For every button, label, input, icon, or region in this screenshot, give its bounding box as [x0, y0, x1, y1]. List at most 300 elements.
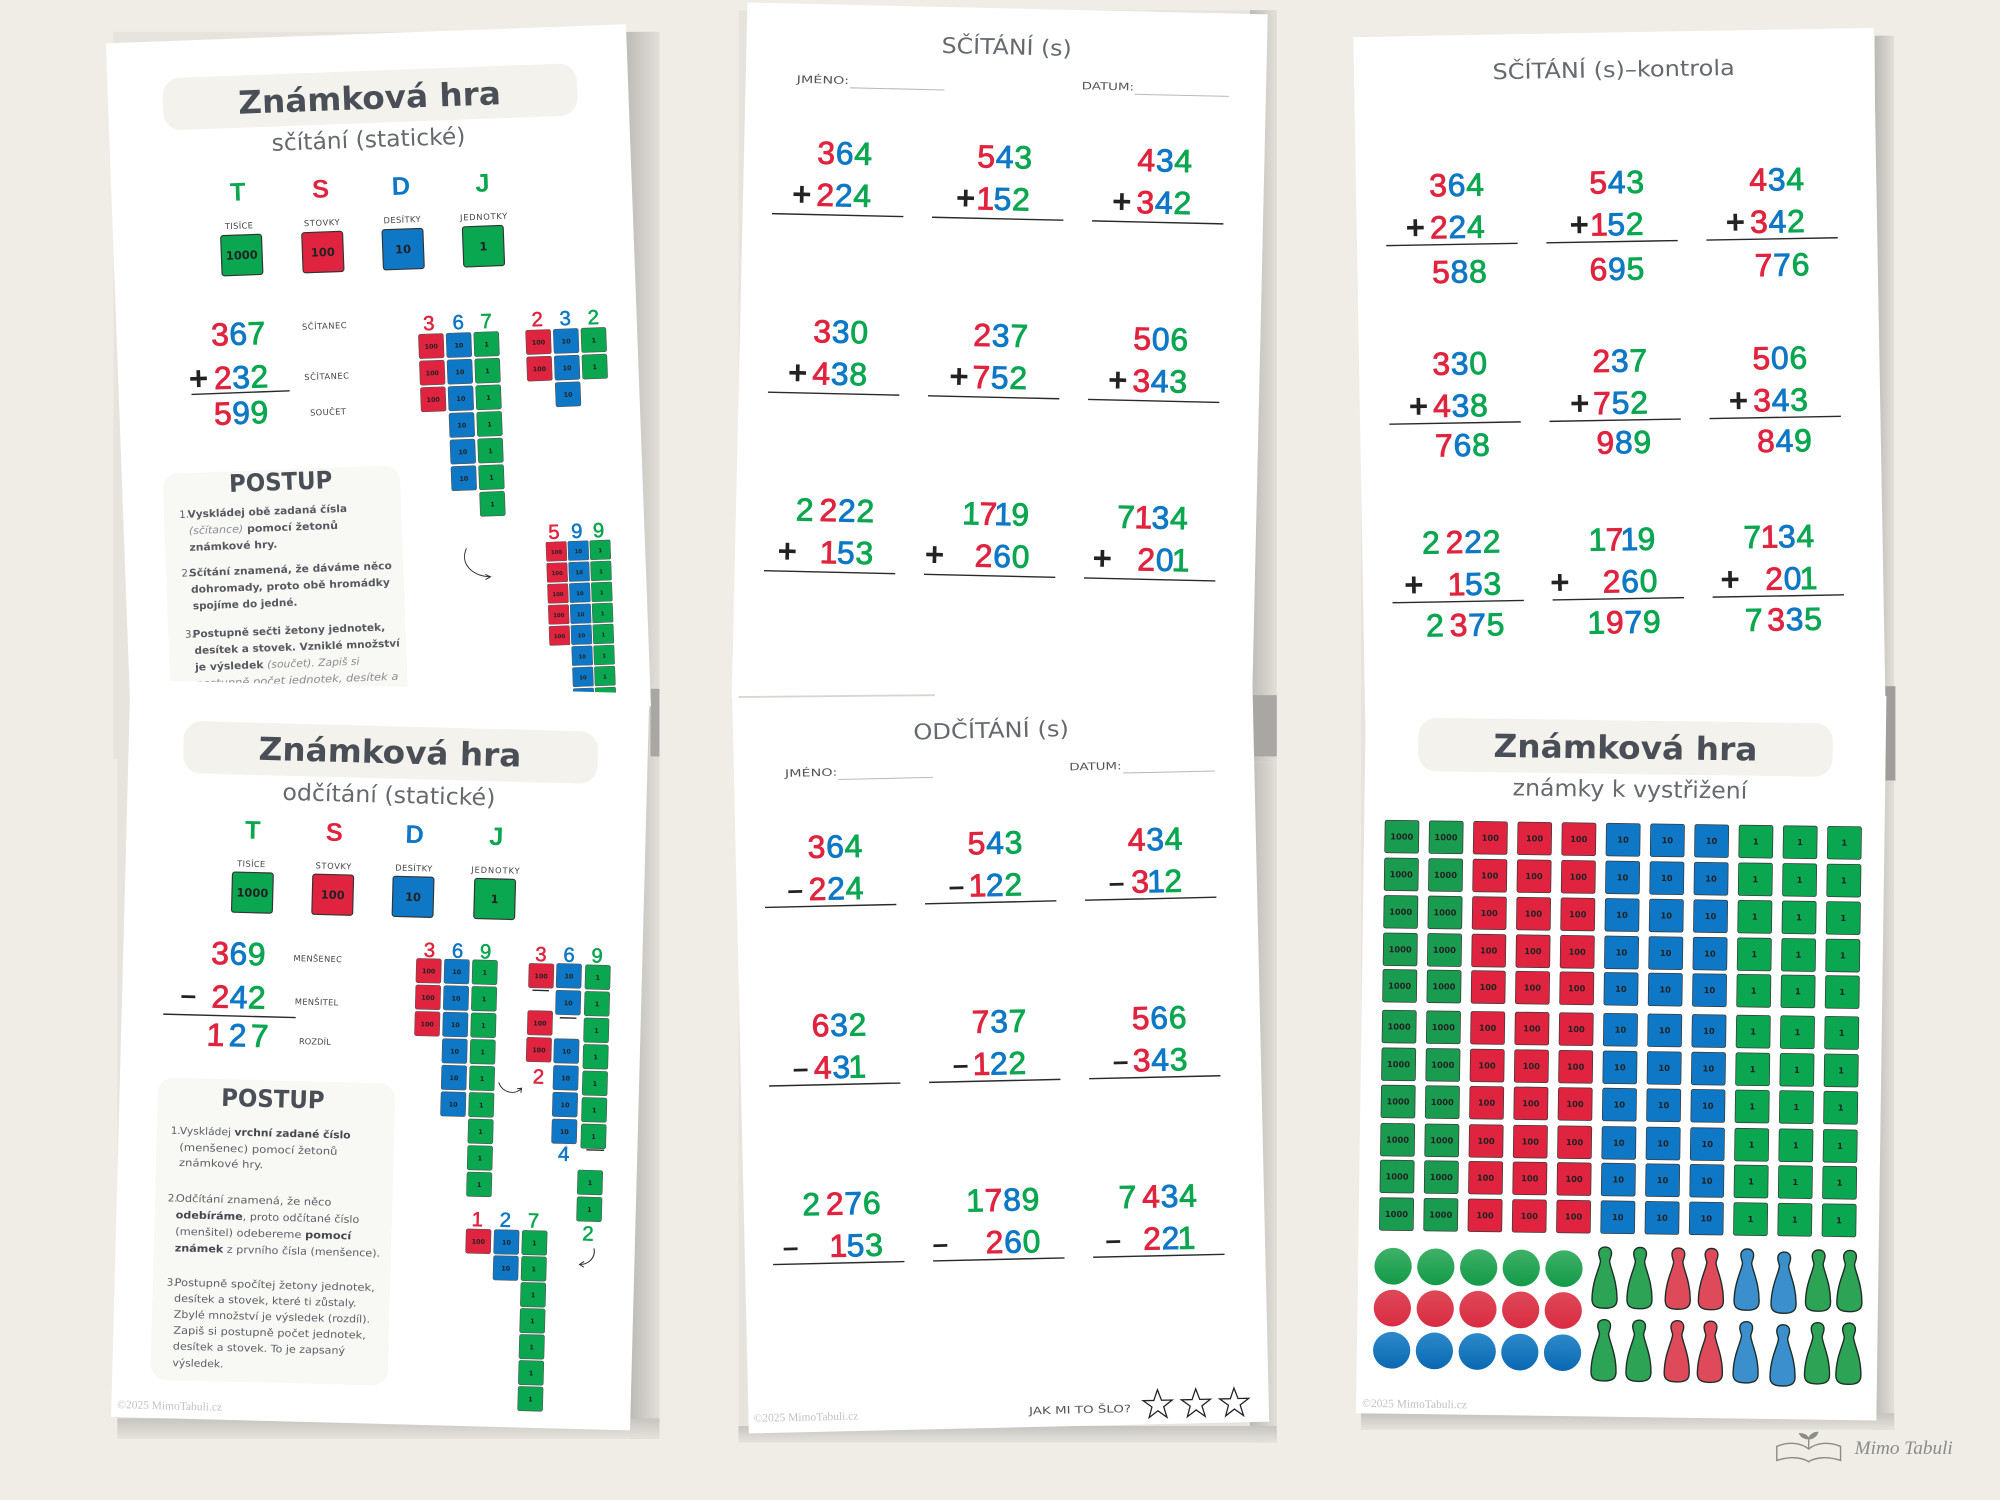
problem 566 - 343: 343 [1132, 1041, 1189, 1078]
sticker row 2: 100 [1481, 870, 1499, 881]
place value letters: S [325, 819, 343, 847]
place value labels: JEDNOTKY [459, 211, 508, 223]
place value tiles: 10 [395, 242, 411, 257]
copyright: ©2025 MimoTabuli.cz [1362, 1398, 1467, 1411]
sticker row 1: 10 [1617, 835, 1629, 845]
sticker row 9 [1380, 1123, 1857, 1163]
page: Známková hra odčítání [111, 680, 649, 1430]
sticker row 10: 1 [1748, 1176, 1754, 1186]
sticker row 7: 100 [1478, 1060, 1496, 1071]
problem 7 134 + 201: 7134 [1117, 499, 1189, 536]
sticker row 4 [1383, 933, 1860, 972]
rating stars [1143, 1388, 1249, 1418]
tile stack with removed tiles: 100 [534, 972, 548, 981]
title: Známková hra [1493, 727, 1758, 769]
problem 434 + 342 [1092, 141, 1225, 224]
step 2: Sčítání znamená, že dáváme něco [189, 560, 392, 579]
problem 566 - 343: 566 [1131, 999, 1188, 1036]
answer 364 + 224 = 588: 588 [1432, 253, 1488, 290]
tile stack 367: 1 [488, 447, 493, 455]
problem 506 + 343 [1088, 319, 1221, 402]
tile stack 599: 10 [578, 654, 586, 660]
sticker row 1: 100 [1482, 833, 1499, 843]
tile stack 232: 100 [532, 338, 546, 347]
problem 7 434 - 221: – [1105, 1224, 1121, 1255]
problem 364 - 224: 224 [808, 870, 864, 907]
sticker row 2: 10 [1705, 874, 1717, 884]
answer 506 + 343 = 849: 343 [1753, 381, 1809, 418]
digits 3 6 9: 3 [424, 940, 435, 962]
digits 3 6 7: 6 [452, 312, 464, 334]
answer 364 + 224 = 588 [1385, 166, 1518, 291]
answer 434 + 342 = 776: + [1725, 204, 1745, 241]
sticker row 11: 10 [1700, 1213, 1712, 1223]
equation labels: SČÍTANEC [302, 319, 347, 332]
sticker row 4: 10 [1704, 949, 1716, 959]
answer 2 222 + 153 = 2 375: 2222 [1422, 523, 1501, 561]
sticker row 2: 1000 [1390, 869, 1413, 879]
problem 330 + 438: 330 [813, 313, 869, 350]
digits 2 3 2 [531, 307, 599, 331]
sticker row 8: 100 [1566, 1099, 1584, 1109]
tile stack with removed tiles: 1 [593, 1053, 598, 1061]
sticker row 1: 1 [1841, 838, 1848, 848]
problem 7 134 + 201 [1084, 498, 1217, 581]
problem 364 + 224: 224 [816, 177, 872, 214]
problem 1 719 + 260: 1719 [962, 495, 1030, 533]
tile stack 367: 1 [485, 367, 490, 375]
tile stack 369: 1 [478, 1128, 483, 1136]
removed counts 2 4 2: 2 [582, 1223, 594, 1246]
sticker row 5: 100 [1568, 983, 1586, 993]
worked subtraction 369 - 242 = 127: – [180, 979, 197, 1010]
place value labels: STOVKY [315, 860, 352, 871]
tile stack with removed tiles: 100 [532, 1046, 546, 1054]
tile stack 367: 10 [454, 341, 464, 350]
answer 1 719 + 260 = 1 979: 1979 [1587, 603, 1662, 641]
problem 434 + 342: + [1112, 183, 1132, 221]
place value letters: J [475, 169, 490, 198]
tile stack 232: 1 [591, 336, 596, 345]
tile stack 369: 10 [451, 1021, 460, 1029]
tile stack 599: 10 [576, 591, 584, 597]
arrow: take away [499, 1082, 522, 1093]
sticker row 5: 10 [1659, 984, 1671, 995]
place value tiles [231, 872, 516, 920]
tile stack with removed tiles: 1 [595, 974, 600, 982]
tile stack 367: 1 [490, 500, 495, 509]
sticker row 7: 1 [1838, 1065, 1844, 1075]
panel: postup steps [150, 1077, 395, 1386]
answer 434 + 342 = 776: 342 [1750, 203, 1806, 240]
place value tiles: 1000 [236, 885, 269, 900]
sticker row 3: 10 [1660, 910, 1672, 921]
answer 330 + 438 = 768: 768 [1435, 427, 1491, 464]
answer 364 + 224 = 588: 364 [1429, 166, 1485, 203]
tile stack 599: 10 [575, 549, 583, 555]
arrow: combine stacks [464, 548, 491, 580]
problem 543 - 122: 122 [968, 866, 1023, 903]
tile stack 232: 10 [562, 337, 571, 346]
answer 506 + 343 = 849: 849 [1757, 422, 1813, 459]
step 3: 3. [167, 1278, 177, 1289]
tile stack with removed tiles: 1 [594, 1027, 599, 1035]
sticker row 10: 1000 [1430, 1172, 1453, 1182]
problem 237 + 752 [928, 316, 1061, 399]
title pill [1418, 718, 1833, 777]
answer 364 + 224 = 588: + [1405, 210, 1425, 247]
sticker row 9: 10 [1613, 1138, 1625, 1148]
tile stack with removed tiles: 1 [592, 1106, 597, 1114]
problem 237 + 752: 752 [972, 359, 1028, 396]
sticker row 2: 100 [1525, 871, 1543, 881]
place value tiles: 100 [321, 888, 345, 902]
place value letters: J [489, 823, 504, 851]
sticker row 3: 100 [1481, 908, 1498, 918]
problem 7 134 + 201: 201 [1137, 541, 1191, 578]
sticker row 9: 100 [1566, 1137, 1584, 1147]
tile stack 369: 1 [479, 1101, 484, 1109]
problem 543 + 152 [932, 137, 1065, 220]
sticker row 7: 1 [1794, 1065, 1800, 1075]
equation labels: SČÍTANEC [304, 369, 349, 382]
sticker row 1: 100 [1526, 833, 1543, 844]
sticker row 1: 1000 [1390, 831, 1414, 842]
sticker row 4: 100 [1480, 945, 1498, 956]
step 2: spojíme do jedné. [193, 597, 298, 612]
worksheet title: SČÍTÁNÍ (s) [941, 33, 1072, 62]
digits 3 6 7: 3 [423, 313, 435, 335]
sticker row 5 [1383, 969, 1859, 1009]
sticker row 11: 1000 [1429, 1210, 1453, 1220]
round counters [1373, 1248, 1583, 1371]
answer 434 + 342 = 776: 434 [1749, 161, 1805, 198]
answer 364 + 224 = 588: 224 [1430, 209, 1486, 245]
tile stack 127: 1 [532, 1239, 537, 1247]
tile stack 367: 10 [458, 448, 468, 456]
worksheet title: ODČÍTÁNÍ (s) [913, 716, 1069, 746]
problem 7 134 + 201: + [1092, 540, 1112, 578]
place value labels: TISÍCE [236, 857, 265, 869]
tile stack with removed tiles: 10 [561, 1101, 570, 1109]
tile stack 369: 10 [450, 1048, 460, 1056]
problem 632 - 431: 431 [814, 1048, 867, 1086]
sticker row 7: 1000 [1431, 1060, 1455, 1070]
problem 434 - 312: 312 [1131, 863, 1183, 900]
sticker row 6 [1382, 1010, 1859, 1049]
sticker row 6: 1 [1750, 1026, 1756, 1037]
place value tiles: 100 [311, 245, 335, 260]
answer 330 + 438 = 768: 438 [1433, 387, 1489, 424]
tile stack 232: 10 [563, 364, 572, 372]
tile stack 232: 100 [533, 365, 547, 373]
tile stack 369: 1 [482, 969, 487, 977]
sticker row 10: 10 [1701, 1176, 1713, 1186]
sticker row 2: 1000 [1434, 870, 1457, 880]
problem 434 - 312: 434 [1127, 821, 1184, 858]
problem 506 + 343: 343 [1132, 362, 1188, 400]
sticker row 2: 10 [1617, 872, 1629, 882]
tile stack 599: 10 [577, 612, 585, 618]
tile stack 127: 100 [472, 1238, 486, 1246]
answer 7 134 + 201 = 7 335 [1711, 517, 1845, 639]
tile stack 127: 1 [528, 1395, 533, 1403]
sticker row 8: 10 [1702, 1101, 1714, 1111]
digits 3 6 7: 7 [480, 311, 492, 333]
sticker row 11: 100 [1476, 1210, 1494, 1220]
tile stack 367: 1 [487, 420, 492, 429]
sticker row 4: 1000 [1433, 945, 1456, 955]
step 3: je výsledek (součet). Zapiš si [194, 656, 360, 674]
tile stack 599: 1 [599, 569, 603, 575]
problem 7 434 - 221 [1091, 1177, 1225, 1258]
step 3: Zapiš si postupně počet jednotek, [173, 1325, 366, 1342]
shadow: right top page [1361, 36, 1895, 781]
answer 237 + 752 = 989: 237 [1592, 342, 1648, 379]
tile stack 127: 1 [531, 1265, 536, 1273]
sticker row 5: 100 [1479, 982, 1497, 992]
sticker row 5: 1000 [1388, 981, 1412, 991]
problem 632 - 431 [767, 1006, 900, 1087]
sticker row 6: 10 [1659, 1025, 1671, 1035]
answer key title: SČÍTÁNÍ (s)–kontrola [1492, 55, 1735, 85]
date field: DATUM: [1082, 81, 1134, 93]
step 2: 2. [168, 1193, 178, 1205]
step 1: (sčítance) pomocí žetonů [189, 519, 338, 537]
problem 237 + 752: + [949, 358, 969, 396]
copyright: ©2025 MimoTabuli.cz [117, 1399, 222, 1414]
problem 506 + 343: + [1108, 362, 1128, 399]
sticker row 5: 1 [1839, 987, 1845, 997]
problem 364 + 224: + [792, 176, 812, 214]
problem 364 - 224: 364 [807, 828, 864, 865]
tile stack with removed tiles: 1 [591, 1133, 596, 1141]
tile stack 367: 1 [486, 394, 491, 402]
problem 2 222 + 153: 2222 [795, 491, 875, 529]
sticker row 7: 100 [1567, 1062, 1585, 1072]
answer 7 134 + 201 = 7 335: 7335 [1745, 601, 1823, 638]
answer 543 + 152 = 695: 152 [1590, 206, 1645, 243]
answer 506 + 343 = 849: + [1729, 383, 1749, 420]
step 3: výsledek. [172, 1357, 224, 1370]
sticker row 3: 1000 [1433, 907, 1457, 918]
place value labels: DESÍTKY [395, 862, 433, 874]
digits 2 3 2: 3 [559, 308, 571, 330]
sticker row 6: 10 [1615, 1025, 1626, 1035]
step 3: Zbylé množství je výsledek (rozdíl). [174, 1309, 370, 1326]
sticker row 4: 10 [1660, 948, 1672, 958]
answer 2 222 + 153 = 2 375 [1391, 523, 1525, 644]
tile stack 599: 1 [601, 632, 606, 639]
sticker row 9: 10 [1701, 1139, 1713, 1149]
step 3: desítek a stovek. Vzniklé množství [194, 638, 400, 657]
place value tiles: 10 [405, 890, 421, 904]
answer 434 + 342 = 776 [1705, 160, 1839, 284]
sticker row 11: 10 [1656, 1213, 1668, 1223]
sticker row 5: 10 [1704, 985, 1716, 995]
tile stack 367: 10 [459, 475, 469, 483]
problem 2 276 - 153: 153 [829, 1227, 884, 1264]
tile stack 367: 10 [457, 421, 467, 430]
problem 364 - 224 [763, 827, 896, 908]
tile stack 599: 10 [575, 570, 583, 576]
tile stack with removed tiles: 10 [560, 1128, 569, 1136]
title: Známková hra [258, 730, 522, 775]
step 3: postupně počet jednotek, desítek a [194, 671, 399, 690]
equation labels: MENŠENEC [293, 952, 342, 964]
problem 737 - 122: – [952, 1049, 969, 1080]
subtitle: sčítání (statické) [271, 124, 466, 157]
tile stack with removed tiles: 1 [588, 1179, 592, 1187]
place value letters: D [405, 821, 424, 849]
tile stack with removed tiles: 1 [587, 1206, 592, 1214]
equation labels: MENŠITEL [295, 995, 339, 1008]
sticker row 7: 1000 [1387, 1059, 1410, 1069]
equation labels: ROZDÍL [299, 1035, 331, 1047]
page: Známková hra stickers [1356, 689, 1886, 1420]
subtitle: známky k vystřižení [1512, 775, 1748, 805]
worked subtraction 369 - 242 = 127: 369 [211, 935, 267, 972]
answer 1 719 + 260 = 1 979: 260 [1602, 563, 1658, 600]
step 2: známek z prvního čísla (menšence). [175, 1242, 380, 1260]
sticker row 3: 10 [1705, 911, 1717, 921]
sticker row 10: 1 [1792, 1177, 1799, 1187]
step 1: známkové hry. [179, 1157, 263, 1171]
sticker row 10: 10 [1612, 1174, 1624, 1185]
tile stack 367: 100 [425, 369, 440, 377]
sticker row 2: 1 [1841, 875, 1847, 886]
digits 3 6 9 [424, 940, 492, 964]
problem 2 222 + 153: 153 [819, 534, 874, 571]
sticker row 1: 10 [1706, 836, 1718, 846]
equation labels [302, 319, 351, 418]
answer 543 + 152 = 695: + [1569, 207, 1589, 244]
answer 543 + 152 = 695: 543 [1589, 164, 1645, 201]
sticker row 1: 10 [1661, 835, 1673, 845]
tile stack 369: 10 [449, 1101, 458, 1109]
place value labels: STOVKY [304, 217, 341, 228]
answer 237 + 752 = 989: + [1570, 385, 1590, 423]
place value tiles [221, 225, 505, 276]
tile stack with removed tiles: 1 [595, 1000, 599, 1008]
sticker row 9: 1 [1793, 1140, 1799, 1150]
tile stack 369: 1 [478, 1154, 482, 1163]
sticker row 6: 1 [1839, 1028, 1845, 1038]
removed counts 2 4 2 [528, 1066, 598, 1246]
sticker row 2: 1 [1752, 874, 1758, 884]
answer 506 + 343 = 849 [1708, 339, 1842, 460]
problem 1 719 + 260: 260 [974, 538, 1031, 575]
sticker row 5: 1 [1751, 986, 1757, 996]
answer 330 + 438 = 768: + [1408, 388, 1428, 425]
worked subtraction 369 - 242 = 127: 242 [211, 978, 267, 1016]
sticker row 6: 1 [1794, 1027, 1801, 1037]
sticker row 11: 10 [1612, 1212, 1624, 1222]
tile stack 599: 100 [553, 613, 565, 619]
problem 434 + 342: 342 [1136, 184, 1192, 221]
sticker row 11: 1 [1748, 1214, 1754, 1224]
sticker row 7: 10 [1658, 1063, 1670, 1073]
sticker row 7: 10 [1703, 1063, 1714, 1074]
tile stack 369: 100 [422, 967, 436, 976]
sticker row 3: 100 [1569, 909, 1587, 919]
place value labels [236, 857, 521, 876]
step 2: (menšitel) odebereme pomocí [175, 1226, 352, 1242]
step 2: odebíráme , proto odčítané číslo [176, 1209, 359, 1226]
answer 330 + 438 = 768: 330 [1432, 345, 1488, 382]
step 1 [179, 503, 349, 554]
place value labels [224, 210, 508, 231]
tile stack 369: 100 [421, 1020, 435, 1029]
tile stack 367: 10 [456, 395, 466, 403]
place value letters [229, 169, 490, 207]
step 3: 3. [185, 629, 195, 641]
step 3: Postupně sečti žetony jednotek, [192, 621, 385, 641]
sticker row 9: 1 [1837, 1141, 1843, 1151]
problem 1 789 - 260 [931, 1180, 1064, 1262]
sticker row 6: 100 [1523, 1023, 1541, 1034]
digits 3 6 9: 9 [480, 941, 492, 964]
place value letters [245, 817, 504, 851]
answer 7 134 + 201 = 7 335: + [1720, 561, 1740, 599]
digits 5 9 9 [548, 520, 605, 544]
sticker row 2 [1384, 858, 1861, 897]
name field: JMÉNO: [795, 73, 849, 87]
date field: DATUM: [1069, 761, 1122, 773]
sticker row 2: 10 [1661, 873, 1673, 883]
problem 434 - 312 [1083, 820, 1216, 901]
tile stack 127: 10 [502, 1238, 511, 1247]
sticker row 10: 100 [1565, 1174, 1583, 1184]
problem 2 276 - 153: – [782, 1231, 799, 1263]
worked addition 367 + 232 = 599: 232 [213, 358, 269, 396]
place value letters: T [229, 178, 246, 207]
problem 330 + 438 [768, 312, 901, 395]
sticker row 1 [1385, 820, 1862, 859]
sticker row 3: 100 [1525, 909, 1542, 919]
place value labels: DESÍTKY [383, 213, 422, 225]
sticker row 4: 10 [1616, 947, 1628, 957]
answer 506 + 343 = 849: 506 [1752, 339, 1808, 376]
step 2 [181, 560, 393, 613]
shadow: right bottom page [1361, 781, 1894, 1430]
step 1: známkové hry. [189, 539, 278, 554]
answer 1 719 + 260 = 1 979: 1719 [1588, 521, 1656, 558]
problem 434 - 312: – [1108, 867, 1125, 898]
tile stack 369: 1 [480, 1048, 485, 1056]
sticker row 1: 100 [1570, 834, 1588, 844]
step 1: 1. [179, 510, 189, 521]
equation labels [291, 952, 342, 1047]
problem 330 + 438: 438 [812, 355, 868, 392]
tile stack 369: 10 [451, 994, 461, 1003]
step 1: (menšenec) pomocí žetonů [179, 1142, 338, 1158]
sticker row 3: 1 [1840, 913, 1846, 923]
sticker row 3: 1000 [1389, 907, 1413, 917]
tile stack 127: 1 [530, 1317, 535, 1325]
tile stack 369: 100 [421, 994, 435, 1002]
problem 434 + 342: 434 [1137, 142, 1193, 179]
shadow: middle top page [739, 10, 1277, 763]
tile stack with removed tiles [522, 963, 610, 1222]
problem 543 - 122: – [948, 870, 965, 902]
problem 2 276 - 153 [771, 1184, 904, 1265]
copyright: ©2025 MimoTabuli.cz [754, 1411, 859, 1425]
tile stack 599: 10 [578, 633, 586, 639]
sticker row 6: 1000 [1432, 1022, 1455, 1032]
problem 1 719 + 260: + [924, 536, 945, 574]
answer 2 222 + 153 = 2 375: 153 [1447, 565, 1502, 602]
